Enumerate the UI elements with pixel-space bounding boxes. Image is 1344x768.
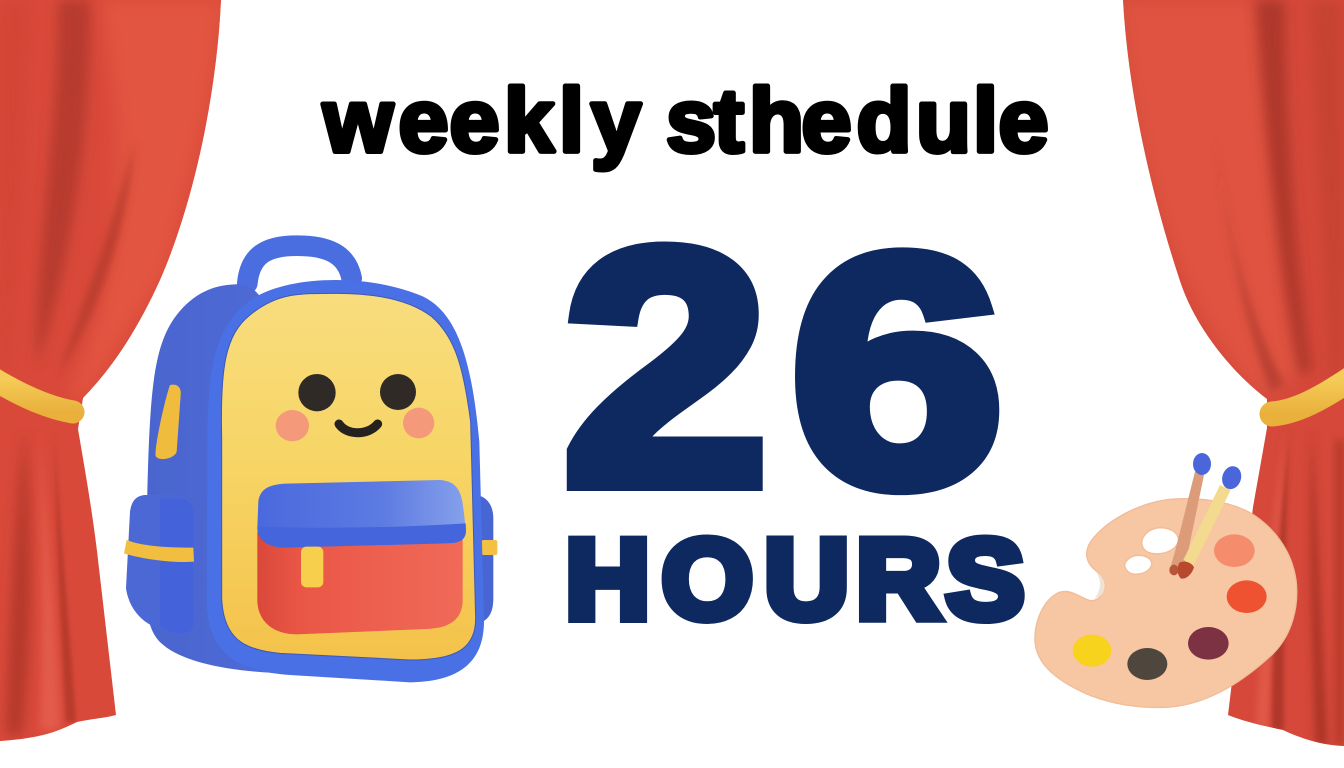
red pocket [257,532,463,634]
pocket zip pull [301,547,323,587]
title: weekly sthedule [322,72,1049,172]
palette notch inner [1094,572,1105,599]
cheeks [276,410,309,441]
backpack yellow panel [221,293,476,660]
backpack left side pocket [124,495,194,634]
brush: tan [1169,453,1211,575]
right curtain tie [1272,378,1344,414]
backpack right side pocket [477,495,493,623]
big number: 2 [563,182,768,554]
backpack side zip [156,385,181,459]
backpack body [146,284,297,673]
backpack front rim [207,280,484,682]
left curtain tie [0,378,73,412]
palette board [1035,499,1297,707]
backpack handle [247,246,352,283]
icon: backpack [124,246,497,682]
face [276,374,434,441]
icon: paint palette [1035,453,1297,707]
eyes [298,374,336,411]
paint: dark [1127,648,1167,680]
hours label: HOURS [566,518,1024,643]
smile [339,424,378,433]
big number: 6 [791,189,1003,553]
paint: plum [1188,627,1229,660]
big number [563,182,1003,554]
brush: yellow [1178,464,1244,579]
paint: yellow [1073,635,1111,667]
paint: orange [1227,580,1267,613]
paint: coral [1214,534,1255,567]
right curtain [1120,0,1344,768]
pocket flap [257,480,466,548]
left curtain [0,0,221,741]
